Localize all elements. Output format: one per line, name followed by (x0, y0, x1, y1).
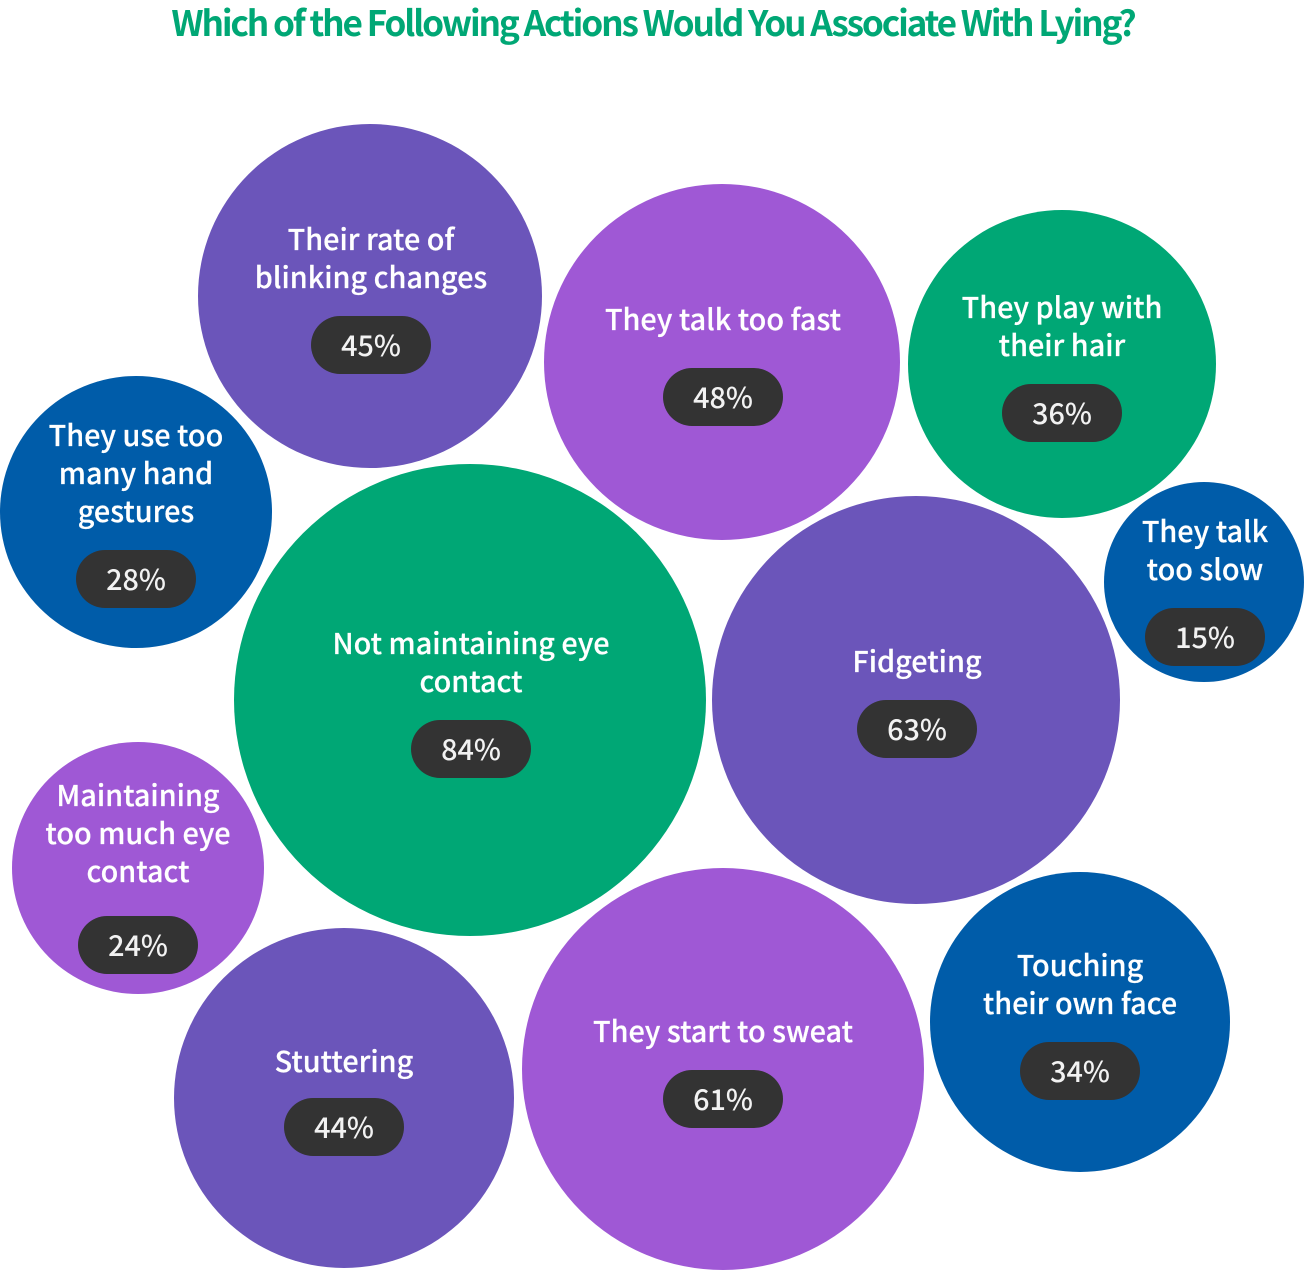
label: they talk too slow: They talk (1142, 510, 1268, 551)
value: 84% (411, 720, 531, 778)
label: they talk too slow: too slow (1147, 548, 1263, 589)
label: they use too many hand gestures: They use too (49, 414, 223, 455)
value: 24%: 24% (108, 924, 168, 965)
value: 36%: 36% (1032, 392, 1092, 433)
label: they talk too slow (1142, 510, 1268, 589)
value: 45% (311, 316, 431, 374)
label: stuttering: Stuttering (275, 1040, 413, 1081)
value: 15% (1145, 608, 1265, 666)
label: they talk too fast: They talk too fast (605, 298, 841, 339)
label: they start to sweat: They start to sweat (593, 1010, 853, 1051)
value: 24% (78, 916, 198, 974)
label: maintaining too much eye contact: Maintaining (56, 774, 220, 815)
bubble: stuttering (174, 928, 514, 1268)
label: their rate of blinking changes: blinking changes (255, 256, 487, 297)
value: 63%: 63% (887, 708, 947, 749)
label: they play with their hair: their hair (999, 324, 1125, 365)
bubble: they play with their hair (908, 210, 1216, 518)
value: 84%: 84% (441, 728, 501, 769)
label: touching their own face (983, 944, 1177, 1023)
value: 61%: 61% (693, 1078, 753, 1119)
bubble: touching their own face (930, 872, 1230, 1172)
label: touching their own face: Touching (1017, 944, 1143, 985)
bubble: fidgeting (712, 496, 1120, 904)
value: 48%: 48% (693, 376, 753, 417)
label: maintaining too much eye contact: too much eye (45, 812, 231, 853)
label: maintaining too much eye contact (45, 774, 231, 891)
bubble: they talk too fast (544, 184, 900, 540)
value: 28%: 28% (106, 558, 166, 599)
bubble: not maintaining eye contact (234, 464, 706, 936)
label: they use too many hand gestures: gestures (78, 490, 194, 531)
label: maintaining too much eye contact: contact (86, 850, 190, 891)
bubble: their rate of blinking changes (198, 124, 542, 468)
bubble: they use too many hand gestures (0, 376, 272, 648)
label: they play with their hair: They play with (962, 286, 1162, 327)
bubble: maintaining too much eye contact (12, 742, 264, 994)
label: their rate of blinking changes: Their rate of (288, 218, 454, 259)
label: fidgeting: Fidgeting (852, 640, 982, 681)
value: 44% (284, 1098, 404, 1156)
value: 28% (76, 550, 196, 608)
label: they play with their hair (962, 286, 1162, 365)
value: 15%: 15% (1175, 616, 1235, 657)
value: 48% (663, 368, 783, 426)
label: they use too many hand gestures (49, 414, 223, 531)
bubble: they start to sweat (522, 868, 924, 1270)
value: 61% (663, 1070, 783, 1128)
value: 34% (1020, 1042, 1140, 1100)
value: 34%: 34% (1050, 1050, 1110, 1091)
label: not maintaining eye contact: Not maintaining eye (332, 622, 610, 663)
value: 63% (857, 700, 977, 758)
label: not maintaining eye contact (332, 622, 610, 701)
label: touching their own face: their own face (983, 982, 1177, 1023)
label: not maintaining eye contact: contact (419, 660, 523, 701)
value: 44%: 44% (314, 1106, 374, 1147)
bubble: they talk too slow (1104, 482, 1304, 682)
value: 36% (1002, 384, 1122, 442)
label: they use too many hand gestures: many hand (59, 452, 213, 493)
label: their rate of blinking changes (255, 218, 487, 297)
value: 45%: 45% (341, 324, 401, 365)
